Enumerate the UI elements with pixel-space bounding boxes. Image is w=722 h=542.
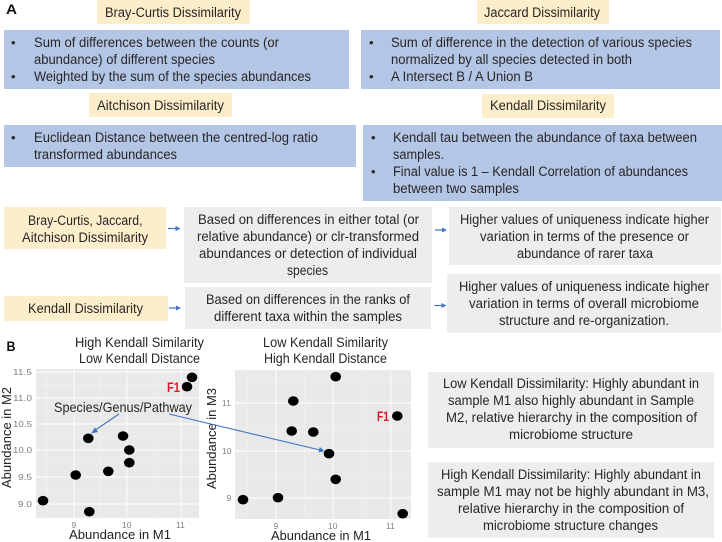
text block: Bray-Curtis definition <box>4 30 349 89</box>
text block: Aitchison definition <box>4 125 356 167</box>
text block: Bray-Curtis definition: • <box>11 35 16 50</box>
text block: Jaccard definition: Sum of difference in the detection of various species <box>391 35 692 50</box>
title: right plot: Low Kendall Similarity <box>263 335 388 350</box>
text block: interpretation microbiome structure: Higher values of uniqueness indicate higher <box>459 279 710 294</box>
title: left plot <box>75 335 204 366</box>
title: left plot: High Kendall Similarity <box>75 335 204 350</box>
scatter plot: M1 vs M2: 10.0 <box>13 445 32 455</box>
text block: basis of Kendall <box>185 287 431 329</box>
scatter plot: M1 vs M3: 9 <box>274 521 278 531</box>
title: left plot: Low Kendall Distance <box>79 351 200 366</box>
text block: interpretation rarer taxa: abundance of rarer taxa <box>517 246 654 261</box>
text block: Kendall definition: samples. <box>393 147 444 162</box>
callout: Species/Genus/Pathway: Species/Genus/Pathway <box>54 400 192 415</box>
arrow <box>168 226 180 231</box>
scatter plot: M1 vs M2: 9 <box>72 520 76 530</box>
text block: basis of abundance metrics <box>184 207 432 283</box>
arrow <box>169 306 181 310</box>
text block: Jaccard definition: • <box>369 69 374 84</box>
panel label A: A <box>6 1 17 17</box>
heading: Kendall: Kendall Dissimilarity <box>490 98 606 113</box>
text block: Bray-Curtis definition: Weighted by the sum of the species abundances <box>34 69 311 84</box>
panel label B: B <box>6 338 16 354</box>
text block: Kendall definition: between two samples <box>393 181 519 196</box>
text block: interpretation rarer taxa: Higher values of uniqueness indicate higher <box>460 212 710 227</box>
heading: Aitchison <box>89 93 232 117</box>
heading: Jaccard <box>477 0 609 24</box>
heading: Kendall <box>482 94 614 118</box>
text block: high Kendall dissimilarity <box>428 462 714 538</box>
text block: low Kendall dissimilarity: sample M1 also highly abundant in Sample <box>448 393 694 408</box>
text block: basis of Kendall: Based on differences in the ranks of <box>206 292 410 307</box>
text block: low Kendall dissimilarity: M2, relative hierarchy in the composition of <box>446 410 697 425</box>
scatter plot: M1 vs M2: 9.0 <box>18 499 32 509</box>
text block: interpretation microbiome structure: structure and re-organization. <box>499 313 669 328</box>
label: Bray-Curtis, Jaccard, Aitchison: Aitchison Dissimilarity <box>22 230 148 245</box>
text block: Jaccard definition <box>361 30 720 89</box>
text block: Aitchison definition: Euclidean Distance between the centred-log ratio <box>34 130 318 145</box>
text block: basis of abundance metrics: Based on differences in either total (or <box>198 212 420 227</box>
scatter plot: M1 vs M3 <box>222 370 411 531</box>
text block: low Kendall dissimilarity: Low Kendall Dissimilarity: Highly abundant in <box>443 376 699 391</box>
text block: low Kendall dissimilarity <box>428 372 714 448</box>
scatter plot: M1 vs M3: 11 <box>386 521 395 531</box>
scatter plot: M1 vs M2: 11.5 <box>13 367 32 377</box>
scatter plot: M1 vs M3: 11 <box>222 398 231 408</box>
text block: Jaccard definition: • <box>369 35 374 50</box>
text block: Kendall definition: Final value is 1 – Kendall Correlation of abundances <box>393 164 688 179</box>
text block: Aitchison definition: • <box>11 130 16 145</box>
scatter plot: M1 vs M3: 9 <box>226 493 232 503</box>
label: Bray-Curtis, Jaccard, Aitchison: Bray-Curtis, Jaccard, <box>28 213 142 228</box>
text block: Kendall definition: Kendall tau between the abundance of taxa between <box>393 130 697 145</box>
text block: Kendall definition <box>363 125 722 201</box>
title: right plot: High Kendall Distance <box>264 351 387 366</box>
panel A: dissimilarity definitions <box>4 0 722 333</box>
text block: basis of abundance metrics: relative abundance) or clr-transformed <box>197 229 419 244</box>
text block: high Kendall dissimilarity: microbiome structure changes <box>483 518 658 533</box>
heading: Jaccard: Jaccard Dissimilarity <box>484 5 600 20</box>
arrow: to right plot point <box>169 414 324 452</box>
text block: basis of Kendall: different taxa within the samples <box>214 309 402 324</box>
scatter plot: M1 vs M2 <box>13 367 199 530</box>
text block: Bray-Curtis definition: Sum of differences between the counts (or <box>34 35 280 50</box>
text block: Kendall definition: • <box>371 130 376 145</box>
label: Kendall Dissimilarity: Kendall Dissimilarity <box>28 301 143 316</box>
scatter plot: M1 vs M2: F1 <box>167 380 180 395</box>
text block: low Kendall dissimilarity: microbiome structure <box>509 427 633 442</box>
text block: interpretation rarer taxa: variation in terms of the presence or <box>480 229 690 244</box>
y axis label: M3: Abundance in M3 <box>204 388 219 489</box>
scatter plot: M1 vs M2: 9.5 <box>18 472 32 482</box>
text block: Aitchison definition: transformed abundances <box>34 147 177 162</box>
scatter plot: M1 vs M2: 10 <box>122 520 132 530</box>
arrow <box>435 228 447 232</box>
text block: interpretation rarer taxa <box>449 207 721 265</box>
title: right plot <box>263 335 388 366</box>
text block: interpretation microbiome structure <box>447 274 721 333</box>
heading: Bray-Curtis: Bray-Curtis Dissimilarity <box>105 5 241 20</box>
text block: basis of abundance metrics: species <box>287 263 328 278</box>
x axis label: M1 left: Abundance in M1 <box>69 527 171 542</box>
arrow: to left plot point <box>91 414 119 434</box>
text block: high Kendall dissimilarity: High Kendall Dissimilarity: Highly abundant in <box>441 467 701 482</box>
text block: Jaccard definition: A Intersect B / A Union B <box>391 69 533 84</box>
scatter plot: M1 vs M3: F1 <box>377 409 389 424</box>
text block: interpretation microbiome structure: variation in terms of overall microbiome <box>469 296 699 311</box>
text block: high Kendall dissimilarity: sample M1 may not be highly abundant in M3, <box>437 484 709 499</box>
text block: basis of abundance metrics: abundances or detection of individual <box>199 246 417 261</box>
text block: Bray-Curtis definition: abundance) of different species <box>34 52 215 67</box>
text block: Bray-Curtis definition: • <box>11 69 16 84</box>
text block: Kendall definition: • <box>371 164 376 179</box>
label: Kendall Dissimilarity <box>4 296 168 321</box>
scatter plot: M1 vs M3: 10 <box>328 521 338 531</box>
heading: Bray-Curtis <box>97 0 250 24</box>
panel B: scatter plots and explanations <box>0 335 714 542</box>
arrow <box>434 303 446 308</box>
scatter plot: M1 vs M2: 11.0 <box>13 393 32 403</box>
scatter plot: M1 vs M3: 10 <box>222 446 232 456</box>
text block: high Kendall dissimilarity: relative hierarchy in the composition of <box>458 501 684 516</box>
heading: Aitchison: Aitchison Dissimilarity <box>97 98 224 113</box>
scatter plot: M1 vs M2: 10.5 <box>13 419 32 429</box>
text block: Jaccard definition: normalized by all species detected in both <box>391 52 632 67</box>
scatter plot: M1 vs M2: 11 <box>176 520 185 530</box>
label: Bray-Curtis, Jaccard, Aitchison <box>4 207 166 249</box>
